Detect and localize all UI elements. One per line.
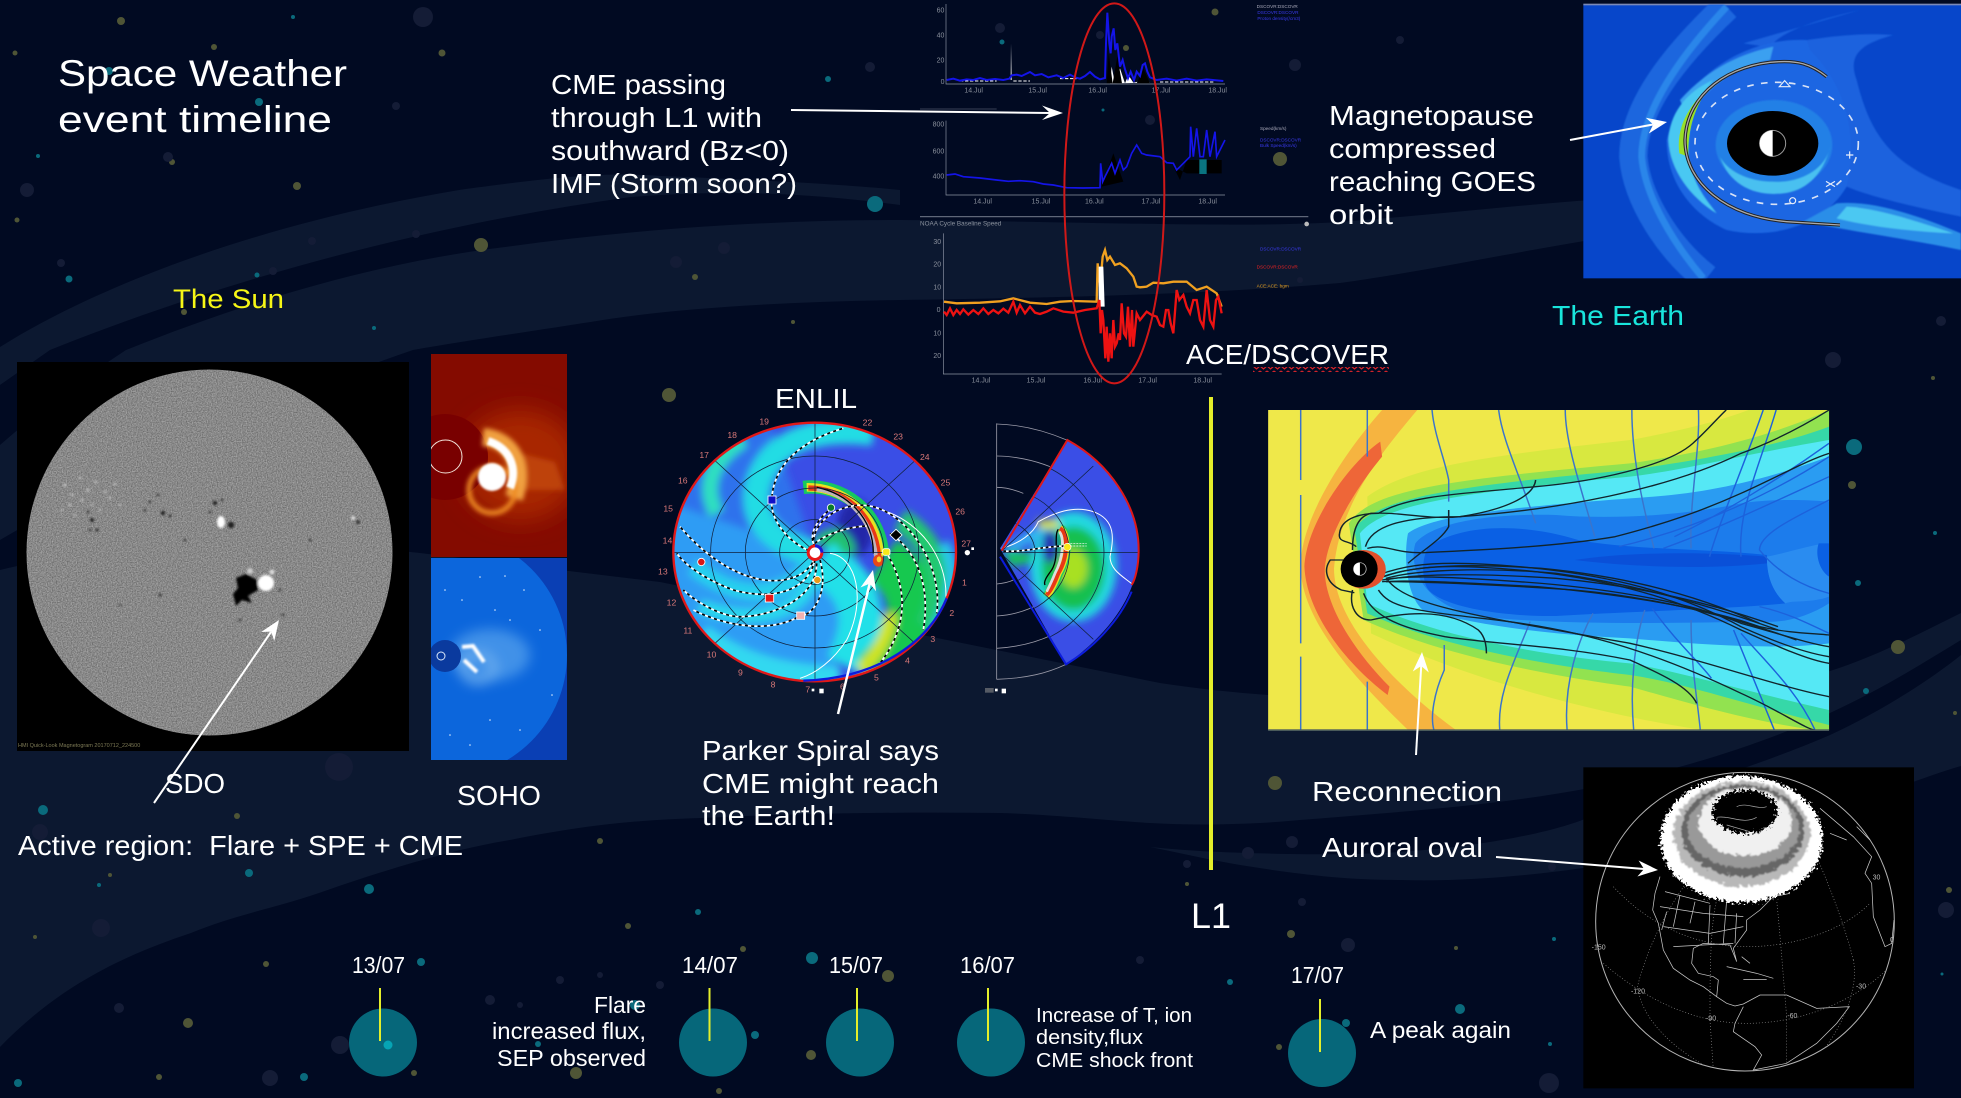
parker spiral field lines [677, 428, 938, 663]
label: Parker Spiral: CME might reach [702, 768, 939, 799]
longitude labels: 10 [707, 649, 716, 659]
chart: bulk speed: 16.Jul [1085, 198, 1104, 205]
title: Space Weather [58, 53, 347, 94]
chart: proton density: DSCOVR:DSCOVR [1257, 10, 1299, 15]
globe coordinate labels: -120 [1631, 988, 1645, 995]
label: Reconnection: Reconnection [1312, 776, 1502, 807]
label: CME passing through L1: southward (Bz<0) [551, 135, 789, 166]
chart: magnetic field Bz: 14.Jul [972, 378, 991, 385]
magnetopause boundary [1685, 62, 1840, 225]
longitude labels: 23 [893, 431, 903, 441]
image: magnetosphere reconnection [1268, 410, 1829, 731]
arrow: auroral oval [1496, 857, 1658, 876]
timeline note: shock front: CME shock front [1036, 1050, 1193, 1072]
longitude labels: 19 [759, 417, 769, 427]
chart: proton density: 16.Jul [1088, 88, 1107, 95]
timeline note: flare [492, 992, 646, 1071]
timeline: 17/07 [1288, 962, 1356, 1087]
label: The Earth: The Earth [1552, 300, 1684, 331]
longitude labels: 16 [678, 475, 688, 485]
magnetospheric field lines [1327, 410, 1829, 730]
chart: proton density: 20 [937, 58, 945, 65]
globe coordinate labels [1592, 874, 1894, 1023]
chart: proton density: 15.Jul [1028, 88, 1047, 95]
chart: magnetic field Bz: DSCOVR:DSCOVR [1260, 247, 1302, 252]
chart: proton density: 40 [937, 32, 945, 39]
chart: proton density: 17.Jul [1152, 88, 1171, 95]
timeline note: shock front: density,flux [1036, 1027, 1143, 1049]
longitude labels: 25 [941, 477, 950, 487]
label: L1: L1 [1191, 897, 1231, 936]
chart: bulk speed: 800 [933, 122, 944, 129]
image: SOHO LASCO C3 [431, 558, 567, 760]
chart: magnetic field Bz: DSCOVR:DSCOVR [1257, 265, 1298, 270]
chart: bulk speed: 17.Jul [1142, 198, 1161, 205]
longitude labels: 18 [727, 430, 737, 440]
label: Parker Spiral: the Earth! [702, 800, 835, 831]
timeline: 16/07: 16/07 [960, 952, 1015, 978]
earth icon [1760, 130, 1786, 156]
label: Parker Spiral: Parker Spiral says [702, 735, 939, 766]
label: Parker Spiral [702, 735, 939, 831]
chart: proton density [937, 4, 1301, 95]
longitude labels: 22 [863, 417, 872, 427]
longitude labels: 13 [658, 567, 668, 577]
image: ACE/DSCOVER solar wind charts: NOAA Cycle Baseline Speed [920, 220, 1002, 227]
timeline note: shock front [1036, 1005, 1193, 1072]
timeline: 14/07: 14/07 [682, 952, 738, 978]
chart: bulk speed: 18.Jul [1198, 198, 1217, 205]
label: CME passing through L1: through L1 with [551, 102, 762, 133]
longitude labels: 17 [699, 450, 709, 460]
label: SOHO: SOHO [457, 780, 541, 811]
label: ACE/DSCOVER: ACE/DSCOVER [1186, 339, 1389, 370]
chart: magnetic field Bz: 20 [933, 262, 941, 269]
label: CME passing through L1: IMF (Storm soon?) [551, 168, 797, 199]
longitude labels: 7 [805, 685, 810, 695]
arrow: CME passing [791, 106, 1063, 120]
image: SDO magnetogram: HMI Quick-Look Magnetogram 20170712_224500 [18, 743, 140, 749]
chart: proton density: 0 [941, 79, 945, 86]
longitude labels: 14 [663, 535, 672, 545]
chart: bulk speed: 600 [933, 148, 944, 155]
sun marker [807, 544, 823, 561]
GOES orbit [1695, 82, 1858, 204]
arrow: reconnection [1413, 652, 1429, 755]
image: SOHO LASCO C2 [431, 354, 567, 557]
label: SDO: SDO [165, 768, 225, 799]
longitude labels: 8 [771, 679, 776, 689]
globe coordinate labels: -150 [1592, 944, 1606, 951]
title [58, 53, 347, 140]
chart: proton density: 14.Jul [964, 88, 983, 95]
longitude labels [658, 417, 971, 695]
chart: bulk speed: Speed(km/s) [1260, 126, 1287, 131]
longitude labels: 12 [667, 597, 676, 607]
solar wind field lines [1301, 410, 1700, 730]
longitude labels: 4 [905, 655, 910, 665]
globe grid [1596, 772, 1894, 1071]
timeline: 15/07 [826, 952, 894, 1076]
chart: proton density: Proton density(/cm3) [1257, 16, 1301, 21]
label: Magnetopause compressed [1329, 100, 1536, 230]
image: SDO magnetogram [17, 362, 409, 751]
heliosphere disc [674, 424, 955, 680]
longitude labels: 15 [663, 503, 673, 513]
chart: magnetic field Bz: 20 [933, 353, 941, 360]
chart: proton density: DSCOVR:DSCOVR [1257, 4, 1298, 9]
chart: magnetic field Bz: 30 [933, 239, 941, 246]
chart: proton density: 60 [937, 8, 945, 15]
image: auroral oval globe [1583, 767, 1914, 1088]
meridional wedge frame [997, 423, 1067, 679]
chart: bulk speed: 15.Jul [1032, 198, 1051, 205]
longitude labels: 24 [920, 452, 930, 462]
longitude labels: 2 [949, 608, 954, 618]
label: Magnetopause compressed: compressed [1329, 133, 1496, 164]
chart: bulk speed [920, 109, 1302, 205]
image: ENLIL model [658, 413, 1143, 700]
title: event timeline [58, 99, 332, 140]
chart: magnetic field Bz: 18.Jul [1193, 378, 1212, 385]
longitude labels: 9 [738, 667, 743, 677]
chart: magnetic field Bz: 17.Jul [1138, 378, 1157, 385]
timeline: 13/07: 13/07 [352, 952, 405, 978]
longitude labels: 11 [683, 625, 693, 635]
chart: bulk speed: Bulk Speed(km/s) [1260, 143, 1297, 148]
timeline: 13/07 [349, 952, 417, 1076]
chart: magnetic field Bz: ACE:ACE: bgm [1257, 283, 1289, 288]
globe coordinate labels: 0 [1890, 937, 1894, 944]
chart: magnetic field Bz [933, 233, 1302, 385]
timeline: 16/07 [957, 952, 1025, 1076]
longitude labels: 27 [961, 539, 971, 549]
meridional wedge [1000, 441, 1138, 663]
timeline note: flare: SEP observed [497, 1045, 646, 1071]
label: Auroral oval: Auroral oval [1322, 832, 1483, 863]
label: CME passing through L1 [551, 69, 797, 199]
outer ring [673, 423, 956, 681]
label: Active region: Active region: Flare + SPE + CME [18, 830, 463, 861]
highlight ellipse [1064, 3, 1164, 383]
arrow: active region [154, 620, 279, 803]
image: magnetopause at GOES [1583, 4, 1961, 278]
timeline: 14/07 [679, 952, 747, 1076]
chart: magnetic field Bz: 10 [933, 284, 941, 291]
arrow: magnetopause [1570, 118, 1667, 140]
continents [1653, 808, 1894, 1070]
timeline note: shock front: Increase of T, ion [1036, 1005, 1192, 1027]
chart: bulk speed: DSCOVR:DSCOVR [1260, 138, 1302, 143]
longitude labels: 6 [840, 681, 845, 691]
timeline: 15/07: 15/07 [829, 952, 883, 978]
chart: bulk speed: 14.Jul [973, 198, 992, 205]
globe coordinate labels: -30 [1856, 984, 1866, 991]
chart: bulk speed: 400 [933, 174, 944, 181]
chart: magnetic field Bz: 16.Jul [1083, 378, 1102, 385]
timeline note: flare: Flare [594, 992, 646, 1018]
longitude labels: 1 [962, 577, 967, 587]
label: Magnetopause compressed: orbit [1329, 199, 1393, 230]
label: The Sun: The Sun [173, 284, 284, 314]
globe coordinate labels: -60 [1787, 1013, 1798, 1020]
globe coordinate labels: -90 [1706, 1016, 1716, 1023]
auroral oval [1661, 776, 1823, 903]
earth with day-night icon [1341, 550, 1386, 589]
longitude labels: 3 [930, 634, 935, 644]
label: ENLIL: ENLIL [775, 383, 857, 414]
longitude labels: 5 [874, 673, 879, 683]
chart: magnetic field Bz: 15.Jul [1027, 378, 1046, 385]
timeline note: flare: increased flux, [492, 1018, 646, 1044]
timeline note: a peak again: A peak again [1370, 1017, 1511, 1043]
timeline: 17/07: 17/07 [1291, 962, 1344, 988]
chart: magnetic field Bz: 10 [933, 330, 941, 337]
label: Magnetopause compressed: Magnetopause [1329, 100, 1534, 131]
spacecraft and planet markers [698, 496, 902, 619]
label: Magnetopause compressed: reaching GOES [1329, 166, 1536, 197]
label: CME passing through L1: CME passing [551, 69, 726, 100]
globe coordinate labels: 30 [1873, 874, 1881, 881]
longitude labels: 26 [955, 507, 965, 517]
image: ACE/DSCOVER solar wind charts [920, 3, 1309, 385]
chart: magnetic field Bz: 0 [937, 307, 941, 314]
L1 marker line [1209, 397, 1213, 870]
arrow: Parker spiral [838, 570, 876, 714]
chart: proton density: 18.Jul [1208, 88, 1227, 95]
